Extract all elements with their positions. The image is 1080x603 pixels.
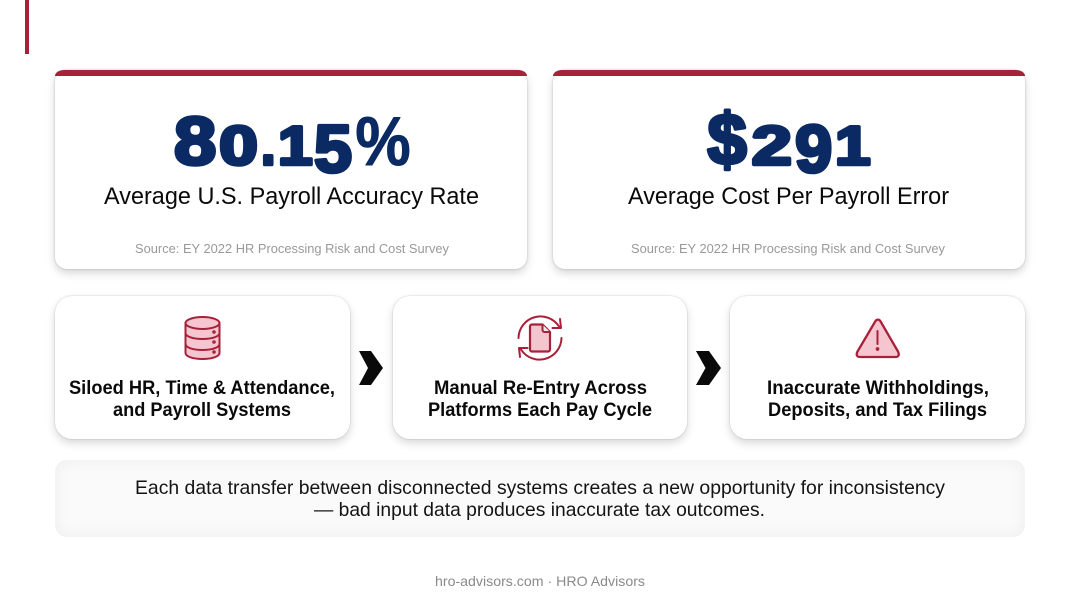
stat value: 80.15%: %: [355, 103, 411, 180]
panel: payroll accuracy stat: [55, 70, 527, 269]
stat value: $291: 1: [835, 115, 870, 177]
callout: takeaway: Each data transfer between disconnected systems creates a new opportunity for inconsistency: [135, 477, 945, 499]
stat value: 80.15%: 0: [219, 115, 258, 177]
callout: takeaway: [55, 460, 1025, 537]
stat value: 80.15%: 5: [314, 113, 352, 187]
stat value: $291: 9: [795, 112, 832, 187]
stat value: 80.15%: 8: [174, 104, 216, 180]
accent bar: [25, 0, 29, 54]
step title: [69, 378, 335, 421]
stat value: $291: 2: [752, 115, 792, 177]
icon: document with refresh arrows: [518, 316, 562, 360]
icon: database: [186, 317, 220, 359]
step title: [428, 378, 652, 421]
stat value: $291: $: [708, 99, 747, 180]
panel: cost per error stat: [553, 70, 1025, 269]
step title: and Payroll Systems: [113, 400, 291, 421]
step title: Siloed HR, Time & Attendance,: [69, 378, 335, 399]
footer: hro-advisors.com · HRO Advisors: [435, 573, 645, 589]
source note: Source: EY 2022 HR Processing Risk and Cost Survey: [135, 241, 449, 256]
panel: manual re-entry step: [393, 296, 687, 439]
stat value: 80.15%: 1: [278, 116, 313, 177]
step title: Manual Re-Entry Across: [434, 378, 647, 399]
callout: takeaway: — bad input data produces inaccurate tax outcomes.: [314, 499, 765, 521]
stat label: Average U.S. Payroll Accuracy Rate: [104, 183, 479, 210]
panel: siloed systems step: [55, 296, 350, 439]
stat value: 80.15%: .: [261, 112, 276, 177]
step title: Platforms Each Pay Cycle: [428, 400, 652, 421]
source note: Source: EY 2022 HR Processing Risk and Cost Survey: [631, 241, 945, 256]
stat label: Average Cost Per Payroll Error: [628, 183, 949, 210]
panel: inaccurate outcomes step: [730, 296, 1025, 439]
step title: Inaccurate Withholdings,: [767, 378, 989, 399]
icon: warning triangle: [857, 320, 899, 357]
step title: [767, 378, 989, 421]
step title: Deposits, and Tax Filings: [768, 400, 987, 421]
stat value: $291: [708, 99, 870, 187]
stat value: 80.15%: [174, 103, 411, 187]
